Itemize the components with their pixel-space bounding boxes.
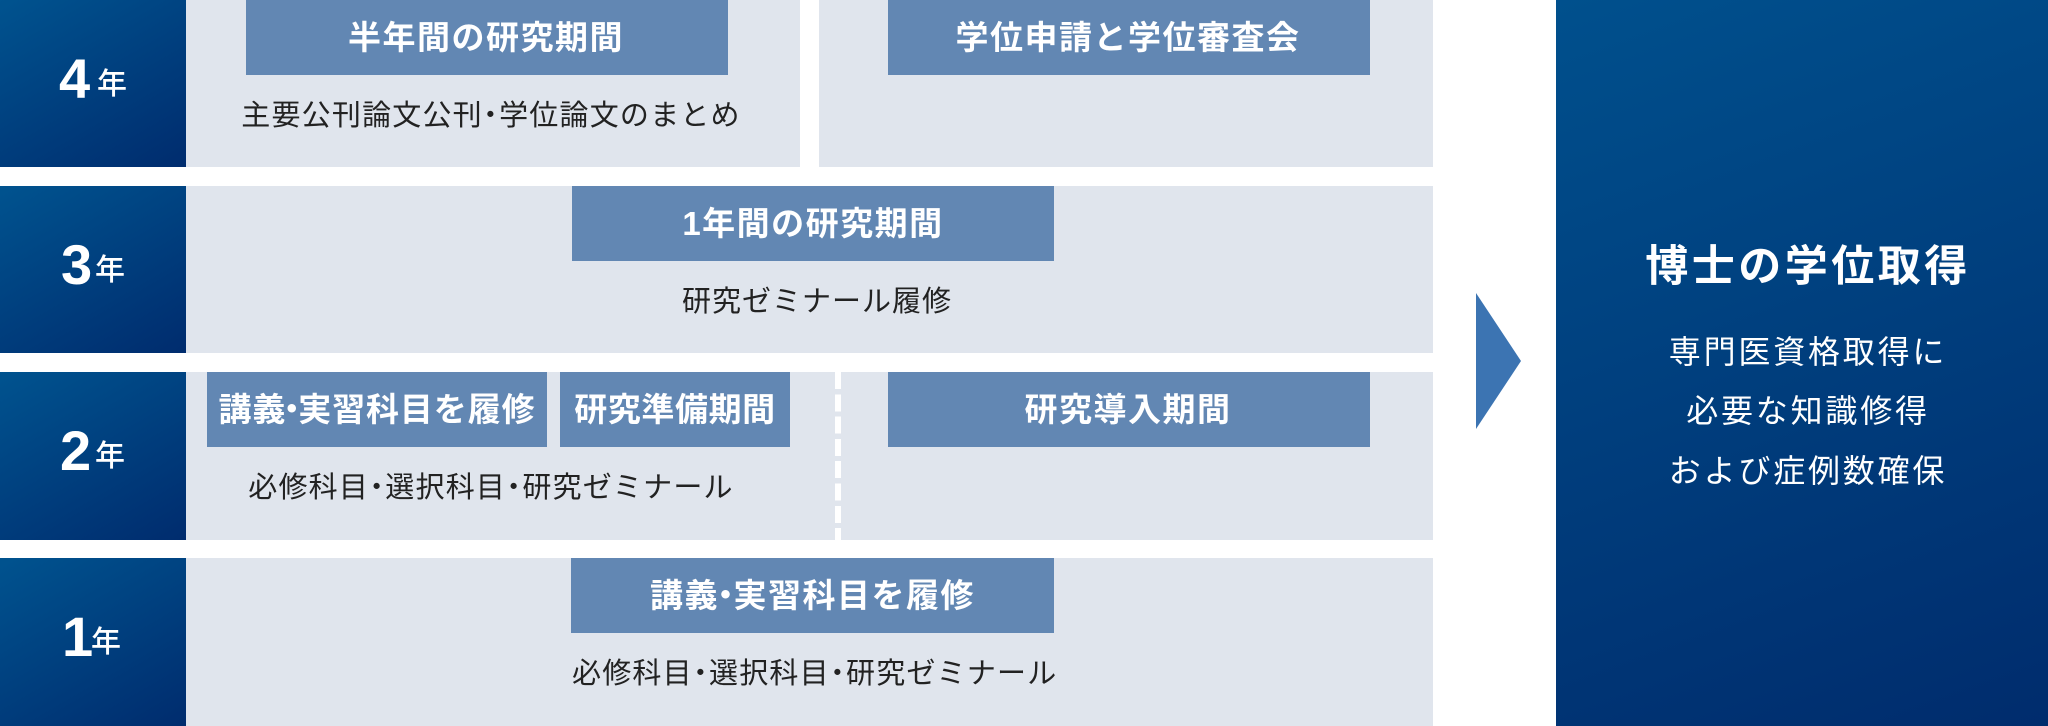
text: thesis publication: 主要公刊論文公刊・学位論文のまとめ: [241, 100, 741, 132]
panel: degree application: [819, 0, 1433, 167]
panel: coursework and research preparation: [186, 372, 1433, 540]
panel: year 2 row: [0, 372, 1433, 540]
year label: 3年: [0, 186, 186, 353]
box: research preparation heading: [560, 372, 790, 447]
panel: one-year research period: [186, 186, 1433, 353]
text: description: 必要な知識修得: [1686, 393, 1930, 429]
panel: lectures and practicals: [186, 558, 1433, 726]
year label: 4年: 4: [59, 47, 90, 110]
box: degree application heading: [888, 0, 1370, 75]
box: one-year research period heading: 1年間の研究期間: [682, 205, 944, 242]
box: one-year research period heading: [572, 186, 1054, 261]
year label: 4年: 年: [97, 68, 127, 101]
text: research seminar: 研究ゼミナール履修: [682, 286, 952, 318]
year label: 2年: [0, 372, 186, 540]
year label: 1年: 1: [62, 605, 93, 668]
text: required and elective subjects: 必修科目・選択科目・研究ゼミナール: [248, 472, 734, 504]
arrow: [1476, 293, 1521, 429]
box: research introduction heading: 研究導入期間: [1024, 391, 1232, 428]
panel: half-year research period: [186, 0, 800, 167]
year label: 3年: 年: [95, 254, 125, 287]
text: required and elective subjects: 必修科目・選択科目・研究ゼミナール: [572, 658, 1057, 690]
text: description: [1669, 334, 1947, 489]
box: lectures and practicals heading: 講義・実習科目を履修: [650, 577, 975, 614]
year label: 2年: 年: [95, 440, 125, 473]
year label: 1年: [0, 558, 186, 726]
year label: 4年: [0, 0, 186, 167]
panel: year 1 row: [0, 558, 1433, 726]
year label: 1年: 年: [91, 626, 121, 659]
box: degree application heading: 学位申請と学位審査会: [956, 19, 1300, 56]
box: lectures and practicals heading: [207, 372, 547, 447]
panel: year 4 row: [0, 0, 1433, 167]
box: half-year research period heading: [246, 0, 728, 75]
divider: dashed line: [835, 372, 841, 540]
box: research preparation heading: 研究準備期間: [574, 391, 776, 428]
panel: degree acquisition: [1556, 0, 2048, 726]
box: half-year research period heading: 半年間の研究期間: [348, 19, 624, 56]
text: description: 専門医資格取得に: [1669, 334, 1947, 370]
panel: year 3 row: [0, 186, 1433, 353]
heading: degree acquisition: 博士の学位取得: [1645, 243, 1971, 291]
box: lectures and practicals heading: 講義・実習科目を履修: [218, 391, 536, 428]
year label: 3年: 3: [61, 233, 92, 296]
year label: 2年: 2: [60, 419, 91, 482]
box: lectures and practicals heading: [571, 558, 1054, 633]
text: description: および症例数確保: [1669, 453, 1947, 489]
box: research introduction heading: [888, 372, 1370, 447]
